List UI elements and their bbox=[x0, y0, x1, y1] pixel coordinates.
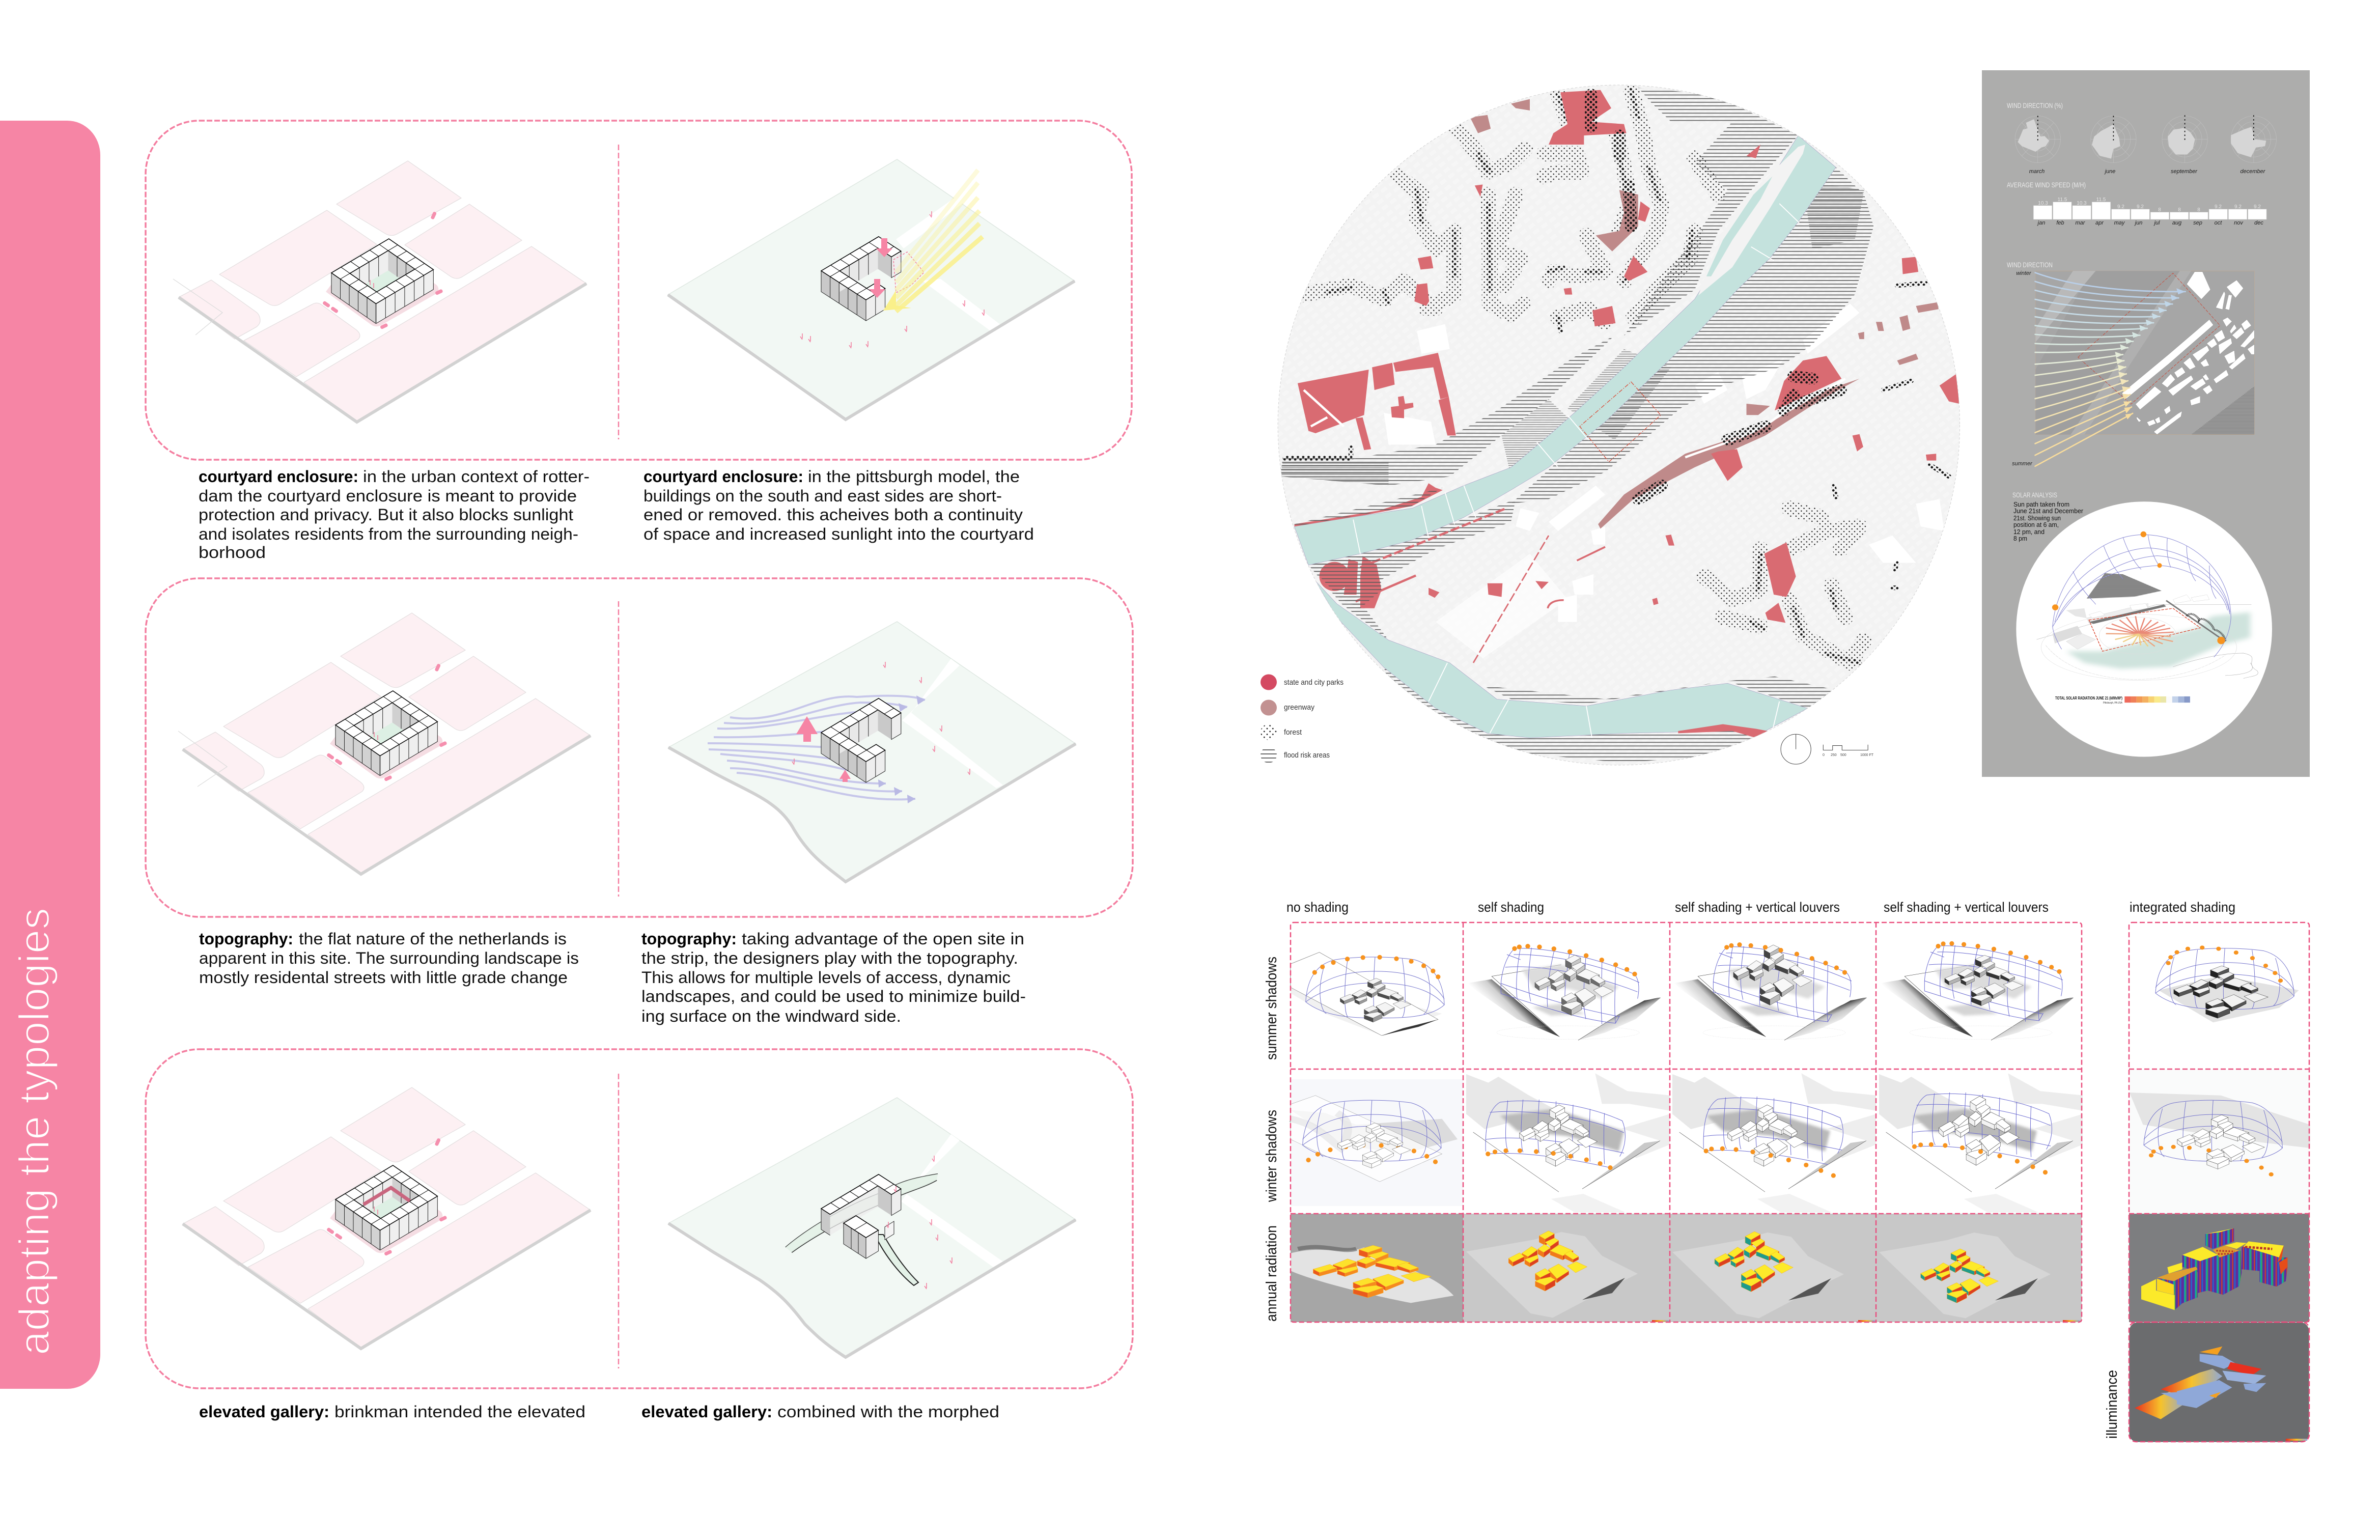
wind season labels: winter bbox=[2016, 270, 2032, 276]
cell: illuminance bbox=[2129, 1323, 2309, 1442]
forest halo bbox=[1304, 90, 1864, 663]
text: courtyard enclosure rotterdam bbox=[199, 467, 590, 562]
text: courtyard enclosure rotterdam: borhood bbox=[199, 543, 266, 562]
riverfront buildings bbox=[2053, 595, 2209, 649]
text: topography pittsburgh: landscapes, and could be used to minimize build- bbox=[641, 987, 1026, 1005]
gallery path bbox=[786, 1174, 938, 1285]
wind rose labels: march bbox=[2029, 169, 2045, 175]
white downtown blocks bbox=[1384, 304, 1944, 622]
bar chart: wind speed: 8 bbox=[2158, 207, 2161, 213]
cell: integrated winter bbox=[2130, 1093, 2310, 1177]
text: elevated gallery brinkman: brinkman intended the elevated bbox=[334, 1403, 585, 1421]
legend bbox=[1261, 674, 1343, 763]
text: courtyard enclosure rotterdam: and isolates residents from the surrounding neigh- bbox=[199, 525, 578, 543]
bar chart: wind speed bbox=[2033, 197, 2266, 226]
legend: flood risk areas bbox=[1284, 751, 1330, 760]
cell: louvers summer B bbox=[1879, 941, 2074, 1040]
text: courtyard enclosure pittsburgh: in the pittsburgh model, the bbox=[808, 467, 1020, 486]
wind season labels: summer bbox=[2012, 461, 2033, 467]
sidebar: adapting the typologies bbox=[0, 121, 100, 1389]
site outline bbox=[2089, 608, 2200, 651]
cell: self shading winter bbox=[1466, 1073, 1670, 1213]
sidebar: adapting the typologies: adapting the typologies bbox=[10, 908, 58, 1355]
cell: integrated radiation bbox=[2141, 1228, 2287, 1310]
diagram: elevated gallery morphed bbox=[668, 1098, 1076, 1357]
text: elevated gallery brinkman bbox=[199, 1403, 585, 1421]
wind direction site map with arrows bbox=[2035, 271, 2254, 466]
bar chart: wind speed: may bbox=[2114, 220, 2125, 226]
radiation rose bbox=[2106, 616, 2174, 647]
bar chart: wind speed: 10.3 bbox=[2038, 201, 2048, 206]
solar text: position at 6 am, bbox=[2013, 521, 2059, 528]
wind season labels bbox=[2012, 270, 2033, 467]
legend: state and city parks bbox=[1284, 678, 1343, 687]
wind rose labels: september bbox=[2171, 169, 2198, 175]
cell: no shading summer bbox=[1291, 953, 1444, 1036]
island bbox=[1698, 145, 1805, 295]
text: topography netherlands: the flat nature of the netherlands is bbox=[299, 930, 567, 948]
bar chart: wind speed: oct bbox=[2215, 220, 2222, 226]
project site outline bbox=[1580, 382, 1661, 462]
bar chart: wind speed: apr bbox=[2095, 220, 2104, 226]
solar text: June 21st and December bbox=[2013, 508, 2083, 515]
column headers: no shading bbox=[1286, 900, 1349, 915]
cell: self shading radiation bbox=[1466, 1231, 1638, 1318]
row: winter backgrounds bbox=[1291, 1069, 2309, 1214]
white path through park bbox=[1304, 379, 1845, 457]
text: courtyard enclosure pittsburgh: of space and increased sunlight into the courtyard bbox=[643, 525, 1034, 543]
base ring ticks bbox=[2046, 646, 2225, 680]
hatched hillside bbox=[2087, 573, 2162, 599]
uplift arrows bbox=[796, 716, 851, 782]
cell: louvers winter B bbox=[1879, 1073, 2083, 1213]
heading: wind direction: WIND DIRECTION bbox=[2007, 261, 2053, 269]
cell: no shading winter bbox=[1291, 1096, 1458, 1182]
cell: louvers radiation A bbox=[1672, 1231, 1844, 1318]
cell: louvers radiation B bbox=[1879, 1233, 2051, 1318]
grey climate panel bbox=[1982, 70, 2310, 777]
cell: no shading radiation bbox=[1291, 1245, 1453, 1303]
scale labels: 0 bbox=[1823, 753, 1825, 757]
bar chart: wind speed: mar bbox=[2076, 220, 2086, 226]
solar text: 12 pm, and bbox=[2013, 528, 2045, 536]
wind rose labels: june bbox=[2104, 169, 2115, 175]
sun positions bbox=[2052, 531, 2225, 644]
hatch and forest over parks bbox=[1294, 95, 1841, 608]
row labels: illuminance bbox=[2104, 1370, 2120, 1439]
column headers: self shading bbox=[1478, 900, 1544, 915]
solar legend text: TOTAL SOLAR RADIATION JUNE 21 (kWh/M²) bbox=[2055, 696, 2122, 701]
heading: solar analysis: SOLAR ANALYSIS bbox=[2012, 491, 2057, 499]
solar legend text bbox=[2055, 696, 2122, 705]
red linear parks bbox=[1360, 508, 1605, 663]
diagram: rotterdam courtyard bbox=[173, 161, 586, 422]
bar chart: wind speed: 10.3 bbox=[2077, 201, 2087, 206]
text: topography netherlands: topography: bbox=[199, 930, 293, 948]
text: courtyard enclosure pittsburgh bbox=[643, 467, 1034, 543]
legend: forest bbox=[1284, 728, 1302, 737]
scale labels: 500 bbox=[1840, 753, 1846, 757]
bar chart: wind speed: nov bbox=[2234, 220, 2244, 226]
bar chart: wind speed: 11.5 bbox=[2096, 197, 2106, 203]
greenway bbox=[1470, 99, 1939, 529]
column headers: integrated shading bbox=[2130, 900, 2235, 915]
solar text bbox=[2013, 501, 2083, 542]
text: topography netherlands: apparent in this site. The surrounding landscape is bbox=[199, 949, 579, 967]
scale bar bbox=[1823, 745, 1868, 750]
bridge bbox=[2166, 601, 2225, 641]
parks bbox=[1294, 90, 1959, 738]
wind streamlines bbox=[708, 696, 925, 799]
diagram: flat netherlands site bbox=[178, 613, 591, 874]
row labels: summer shadows bbox=[1264, 957, 1280, 1060]
text: topography netherlands bbox=[199, 930, 579, 987]
row labels bbox=[1264, 957, 2120, 1439]
text: courtyard enclosure rotterdam: protection and privacy. But it also blocks sunlight bbox=[199, 506, 573, 524]
contour lines bbox=[2037, 604, 2258, 681]
panel: courtyard enclosure bbox=[146, 121, 1132, 460]
text: topography netherlands: mostly residental streets with little grade change bbox=[199, 968, 568, 987]
bar chart: wind speed: jun bbox=[2134, 220, 2142, 226]
column headers: self shading + vertical louvers bbox=[1675, 900, 1840, 915]
flood risk hatch bbox=[1280, 88, 1873, 763]
bar chart: wind speed: 9.2 bbox=[2215, 204, 2222, 210]
bar chart: wind speed: 9.2 bbox=[2254, 204, 2261, 210]
text: elevated gallery morphed: elevated gallery: bbox=[641, 1403, 772, 1421]
text: courtyard enclosure rotterdam: dam the courtyard enclosure is meant to provide bbox=[199, 487, 577, 505]
cell: integrated summer bbox=[2155, 945, 2299, 1022]
wind arrows bbox=[2035, 272, 2186, 466]
site map circle bbox=[1278, 85, 1960, 765]
heading: average wind speed: AVERAGE WIND SPEED (M/H) bbox=[2007, 181, 2086, 189]
panel: topography bbox=[146, 578, 1133, 917]
text: topography pittsburgh: This allows for multiple levels of access, dynamic bbox=[641, 968, 1011, 987]
bar chart: wind speed: 9.2 bbox=[2137, 204, 2144, 210]
text: elevated gallery brinkman: elevated gallery: bbox=[199, 1403, 329, 1421]
rivers bbox=[1294, 135, 1836, 738]
bar chart: wind speed: 8 bbox=[2178, 207, 2181, 213]
scale labels: 1000 FT bbox=[1860, 753, 1874, 757]
bridges bbox=[1353, 204, 1799, 738]
cell: louvers winter A bbox=[1672, 1073, 1876, 1213]
wind roses bbox=[2015, 115, 2276, 163]
solar text: Sun path taken from bbox=[2013, 501, 2069, 508]
solar legend text: Pittsburgh, PA USA bbox=[2103, 702, 2122, 705]
river wash bbox=[2066, 612, 2250, 669]
forest core bbox=[1285, 90, 1949, 663]
panel: elevated gallery bbox=[146, 1049, 1133, 1388]
bar chart: wind speed: jan bbox=[2037, 220, 2045, 226]
sun path dome bbox=[2053, 535, 2231, 657]
bar chart: wind speed: 8 bbox=[2197, 207, 2200, 213]
text: topography pittsburgh: the strip, the designers play with the topography. bbox=[641, 949, 1018, 967]
legend: greenway bbox=[1284, 703, 1314, 712]
radiation swatches bbox=[2124, 696, 2190, 703]
bar chart: wind speed: feb bbox=[2056, 220, 2064, 226]
bar chart: wind speed: sep bbox=[2193, 220, 2202, 226]
row labels: winter shadows bbox=[1264, 1110, 1280, 1202]
bar chart: wind speed: jul bbox=[2153, 220, 2160, 226]
text: courtyard enclosure pittsburgh: courtyard enclosure: bbox=[643, 467, 803, 486]
solar text: 21st. Showing sun bbox=[2013, 515, 2061, 522]
diagram: morphed topography with wind bbox=[668, 622, 1076, 882]
text: topography pittsburgh: ing surface on the windward side. bbox=[641, 1007, 901, 1025]
wind rose labels bbox=[2029, 169, 2266, 175]
bar chart: wind speed: 9.2 bbox=[2234, 204, 2242, 210]
sun arrows bbox=[869, 238, 892, 298]
text: elevated gallery morphed: combined with the morphed bbox=[777, 1403, 999, 1421]
sunlight rays bbox=[883, 170, 983, 312]
column headers bbox=[1286, 900, 2235, 915]
text: courtyard enclosure rotterdam: in the urban context of rotter- bbox=[363, 467, 590, 486]
text: elevated gallery morphed bbox=[641, 1403, 999, 1421]
row: annual radiation backgrounds bbox=[1291, 1214, 2309, 1322]
wind rose labels: december bbox=[2241, 169, 2266, 175]
text: courtyard enclosure rotterdam: courtyard enclosure: bbox=[199, 467, 358, 486]
diagram: elevated gallery brinkman bbox=[183, 1087, 591, 1349]
text: topography pittsburgh bbox=[641, 930, 1026, 1025]
bar chart: wind speed: 9.2 bbox=[2117, 204, 2124, 210]
bar chart: wind speed: aug bbox=[2172, 220, 2182, 226]
scale labels: 250 bbox=[1831, 753, 1837, 757]
cell: self shading summer bbox=[1466, 944, 1661, 1040]
diagram: pittsburgh courtyard with sunlight bbox=[668, 159, 1075, 419]
bar chart: wind speed: 11.5 bbox=[2058, 197, 2067, 203]
row labels: annual radiation bbox=[1264, 1225, 1280, 1322]
text: topography pittsburgh: topography: bbox=[641, 930, 737, 948]
solar text: 8 pm bbox=[2013, 535, 2027, 542]
solar diagram bbox=[2016, 501, 2272, 757]
shading grid frame bbox=[1291, 922, 2309, 1442]
heading: wind direction percent: WIND DIRECTION (%) bbox=[2007, 101, 2063, 109]
scale labels bbox=[1823, 753, 1874, 757]
text: courtyard enclosure pittsburgh: ened or removed. this acheives both a continuity bbox=[643, 506, 1023, 524]
column headers: self shading + vertical louvers bbox=[1884, 900, 2049, 915]
cell: louvers summer A bbox=[1672, 942, 1867, 1040]
text: topography pittsburgh: taking advantage of the open site in bbox=[742, 930, 1024, 948]
north compass bbox=[1781, 734, 1811, 764]
radiation legend strips bbox=[1652, 1320, 2307, 1441]
text: courtyard enclosure pittsburgh: buildings on the south and east sides are short- bbox=[643, 487, 1002, 505]
bar chart: wind speed: dec bbox=[2254, 220, 2263, 226]
